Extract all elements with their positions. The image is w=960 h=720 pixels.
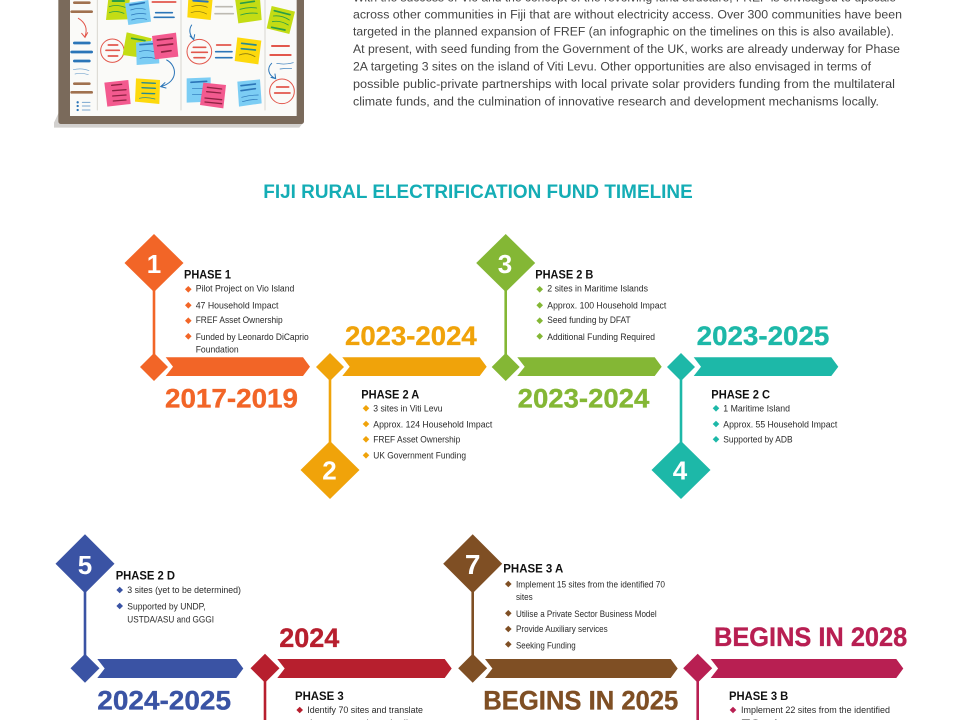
milestone 5: Phase 2 D: Supported by UNDP, bbox=[127, 602, 206, 612]
intro paragraph: possible public-private partnerships with local private solar providers funding from the multilateral bbox=[353, 77, 895, 91]
milestone 3: Phase 2 B: Approx. 100 Household Impact bbox=[547, 301, 667, 311]
milestone 6: Phase 3 bbox=[250, 623, 452, 720]
milestone 8: Phase 3 B: BEGINS IN 2028 bbox=[714, 622, 907, 652]
milestone 1: Phase 1: 47 Household Impact bbox=[196, 301, 279, 311]
milestone 3: Phase 2 B: Seed funding by DFAT bbox=[547, 315, 631, 325]
milestone 6: Phase 3: 2024 bbox=[279, 623, 339, 653]
milestone 1: Phase 1: Pilot Project on Vio Island bbox=[196, 284, 294, 294]
milestone 4: Phase 2 C: PHASE 2 C bbox=[711, 387, 770, 401]
milestone 7: Phase 3 A: Seeking Funding bbox=[516, 641, 576, 651]
milestone 7: Phase 3 A: sites bbox=[516, 592, 533, 602]
milestone 1: Phase 1: FREF Asset Ownership bbox=[196, 315, 283, 325]
intro paragraph bbox=[353, 0, 902, 108]
milestone 7: Phase 3 A: Implement 15 sites from the identified 70 bbox=[516, 579, 665, 589]
milestone 4: Phase 2 C: 1 Maritime Island bbox=[723, 404, 790, 414]
milestone 3: Phase 2 B: 2 sites in Maritime Islands bbox=[547, 284, 649, 294]
milestone 5: Phase 2 D: 3 sites (yet to be determined) bbox=[127, 585, 241, 595]
milestone 7: Phase 3 A: Provide Auxiliary services bbox=[516, 624, 608, 634]
intro paragraph: At present, with seed funding from the Government of the UK, works are already underway for Phase bbox=[353, 42, 900, 56]
milestone 4: Phase 2 C: 4 bbox=[673, 456, 688, 486]
milestone 2: Phase 2 A: 3 sites in Viti Levu bbox=[373, 404, 443, 414]
milestone 7: Phase 3 A: 7 bbox=[465, 549, 480, 580]
milestone 7: Phase 3 A: PHASE 3 A bbox=[503, 562, 564, 576]
milestone 7: Phase 3 A: Utilise a Private Sector Business Model bbox=[516, 609, 657, 619]
milestone 2: Phase 2 A: PHASE 2 A bbox=[361, 387, 420, 401]
milestone 4: Phase 2 C: Approx. 55 Household Impact bbox=[723, 420, 838, 430]
milestone 6: Phase 3: Identify 70 sites and translate bbox=[307, 705, 423, 715]
milestone 2: Phase 2 A: 2023-2024 bbox=[345, 321, 477, 351]
milestone 6: Phase 3: PHASE 3 bbox=[295, 689, 344, 703]
milestone 3: Phase 2 B: PHASE 2 B bbox=[535, 268, 594, 282]
milestone 5: Phase 2 D: 2024-2025 bbox=[97, 685, 231, 715]
milestone 3: Phase 2 B: 3 bbox=[498, 249, 512, 279]
milestone 1: Phase 1: Foundation bbox=[196, 344, 239, 354]
milestone 7: Phase 3 A: BEGINS IN 2025 bbox=[483, 685, 678, 715]
milestone 2: Phase 2 A: Approx. 124 Household Impact bbox=[373, 420, 493, 430]
intro paragraph: across other communities in Fiji that are without electricity access. Over 300 communities have been bbox=[353, 8, 902, 22]
milestone 8: Phase 3 B: PHASE 3 B bbox=[729, 689, 789, 703]
intro paragraph: 2A targeting 3 sites on the island of Viti Levu. Other opportunities are also envisaged in terms of bbox=[353, 60, 872, 74]
milestone 1: Phase 1 bbox=[124, 234, 310, 414]
intro paragraph: climate funds, and the culmination of innovative research and development mechanisms locally. bbox=[353, 94, 879, 108]
milestone 2: Phase 2 A bbox=[300, 321, 493, 499]
milestone 7: Phase 3 A bbox=[443, 534, 678, 715]
milestone 1: Phase 1: Funded by Leonardo DiCaprio bbox=[196, 332, 309, 342]
milestone 1: Phase 1: 2017-2019 bbox=[165, 384, 298, 414]
milestone 2: Phase 2 A: 2 bbox=[322, 456, 337, 486]
milestone 2: Phase 2 A: FREF Asset Ownership bbox=[373, 435, 460, 445]
title: FIJI RURAL ELECTRIFICATION FUND TIMELINE bbox=[263, 181, 693, 203]
milestone 4: Phase 2 C: 2023-2025 bbox=[697, 321, 829, 351]
milestone 5: Phase 2 D: PHASE 2 D bbox=[116, 568, 175, 582]
milestone 1: Phase 1: 1 bbox=[147, 249, 161, 279]
milestone 4: Phase 2 C: Supported by ADB bbox=[723, 435, 793, 445]
intro paragraph: targeted in the planned expansion of FREF (an infographic on the timelines on this is also available). bbox=[353, 25, 894, 39]
milestone 3: Phase 2 B: Additional Funding Required bbox=[547, 332, 655, 342]
milestone 8: Phase 3 B: Implement 22 sites from the identified bbox=[741, 705, 890, 715]
milestone 5: Phase 2 D: USTDA/ASU and GGGI bbox=[127, 615, 214, 625]
milestone 1: Phase 1: PHASE 1 bbox=[184, 268, 231, 282]
milestone 3: Phase 2 B: 2023-2024 bbox=[518, 384, 649, 414]
milestone 3: Phase 2 B bbox=[476, 234, 667, 414]
milestone 4: Phase 2 C bbox=[652, 321, 838, 499]
milestone 5: Phase 2 D bbox=[56, 534, 243, 715]
milestone 8: Phase 3 B bbox=[683, 622, 907, 720]
milestone 5: Phase 2 D: 5 bbox=[78, 550, 92, 580]
milestone 2: Phase 2 A: UK Government Funding bbox=[373, 451, 466, 461]
illustration: planning board with sticky notes bbox=[54, 0, 304, 128]
